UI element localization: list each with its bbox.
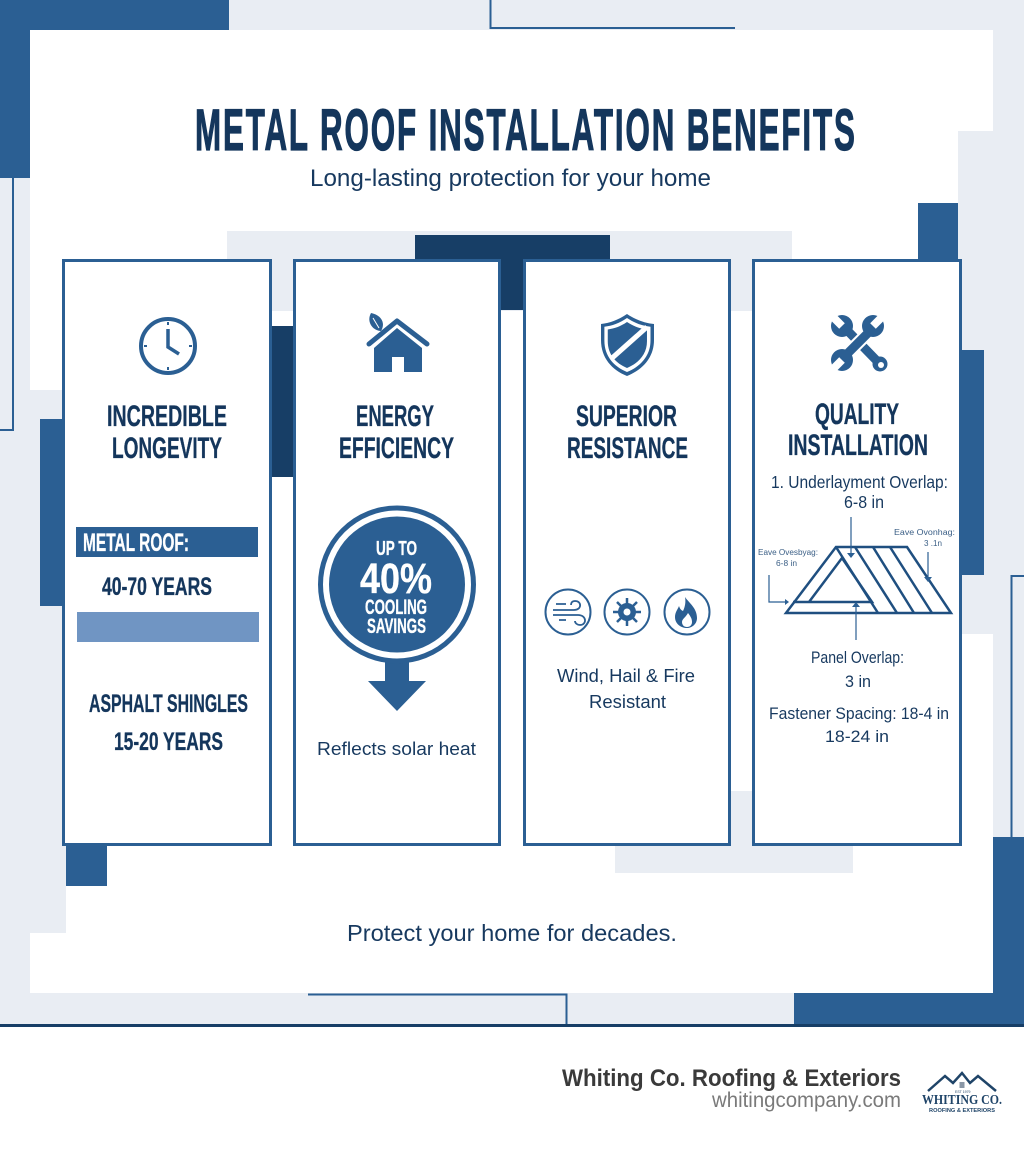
text: underlayment overlap (771, 472, 948, 512)
text: panel overlap: 3 in (845, 672, 871, 691)
badge: 40% cooling savings (320, 508, 474, 711)
bar: asphalt shingles (77, 612, 259, 642)
panel: superior resistance (524, 260, 730, 844)
heading: quality installation: INSTALLATION (788, 429, 928, 462)
text: panel overlap (811, 648, 904, 691)
text: fastener spacing: Fastener Spacing: 18-4 in (769, 704, 949, 723)
text: fastener spacing: 18-24 in (825, 727, 889, 746)
heading: quality installation: QUALITY (815, 398, 899, 431)
logo: whiting co (922, 1073, 1002, 1114)
logo: whiting co: ROOFING & EXTERIORS (929, 1108, 996, 1114)
text: fastener spacing (769, 704, 949, 746)
text: underlayment overlap: 6-8 in (844, 492, 884, 512)
value: metal roof years: 40-70 YEARS (102, 573, 212, 601)
caption: wind, hail and fire resistant: Wind, Hail & Fire (557, 665, 695, 686)
panel: quality installation (754, 260, 960, 844)
heading: superior resistance: SUPERIOR (576, 400, 677, 433)
heading: incredible longevity (107, 400, 227, 465)
diagram: roof cross-section: Eave Ovonhag: (894, 528, 955, 537)
icon: fire (664, 590, 710, 634)
panel: energy efficiency (294, 260, 500, 844)
text: panel overlap: Panel Overlap: (811, 648, 904, 667)
heading: incredible longevity: LONGEVITY (112, 432, 222, 465)
diagram: roof cross-section: 3 .1n (924, 539, 942, 548)
panel: incredible longevity (64, 260, 270, 844)
badge: 40% cooling savings: UP TO (376, 538, 417, 560)
caption: wind, hail and fire resistant (557, 665, 695, 712)
icon: wind (546, 590, 590, 634)
logo: whiting co: EST 1979 (955, 1090, 971, 1094)
badge: 40% cooling savings: SAVINGS (367, 615, 426, 638)
value: asphalt years: 15-20 YEARS (114, 728, 223, 756)
heading: energy efficiency: EFFICIENCY (339, 432, 454, 465)
heading: energy efficiency: ENERGY (356, 400, 434, 433)
logo: whiting co: WHITING CO. (922, 1093, 1002, 1108)
text: underlayment overlap: 1. Underlayment Overlap: (771, 472, 948, 492)
diagram: roof cross-section (758, 517, 955, 640)
subtitle: Long-lasting protection for your home (310, 165, 711, 192)
caption: wind, hail and fire resistant: Resistant (589, 691, 666, 712)
badge: 40% cooling savings: COOLING (365, 596, 427, 619)
label: asphalt shingles: ASPHALT SHINGLES (89, 690, 248, 718)
heading: incredible longevity: INCREDIBLE (107, 400, 227, 433)
footer: website: whitingcompany.com (711, 1089, 901, 1112)
icon: crossed wrenches (829, 313, 888, 373)
heading: energy efficiency (339, 400, 454, 465)
bar: metal roof: METAL ROOF: (83, 529, 189, 557)
icon: house with leaf (369, 313, 427, 372)
heading: quality installation (788, 398, 928, 462)
title: METAL ROOF INSTALLATION BENEFITS (195, 98, 855, 162)
badge: 40% cooling savings: 40% (360, 555, 432, 603)
footer: company name: Whiting Co. Roofing & Exteriors (562, 1065, 901, 1092)
diagram: roof cross-section: Eave Ovesbyag: (758, 548, 818, 557)
diagram: roof cross-section: 6-8 in (776, 559, 797, 568)
closing tagline: Protect your home for decades. (347, 920, 677, 946)
heading: superior resistance: RESISTANCE (567, 432, 688, 465)
caption: reflects solar heat: Reflects solar heat (317, 738, 476, 759)
icon: shield (601, 314, 654, 376)
heading: superior resistance (567, 400, 688, 465)
icon: hail (604, 590, 650, 634)
icon: clock (141, 319, 195, 373)
